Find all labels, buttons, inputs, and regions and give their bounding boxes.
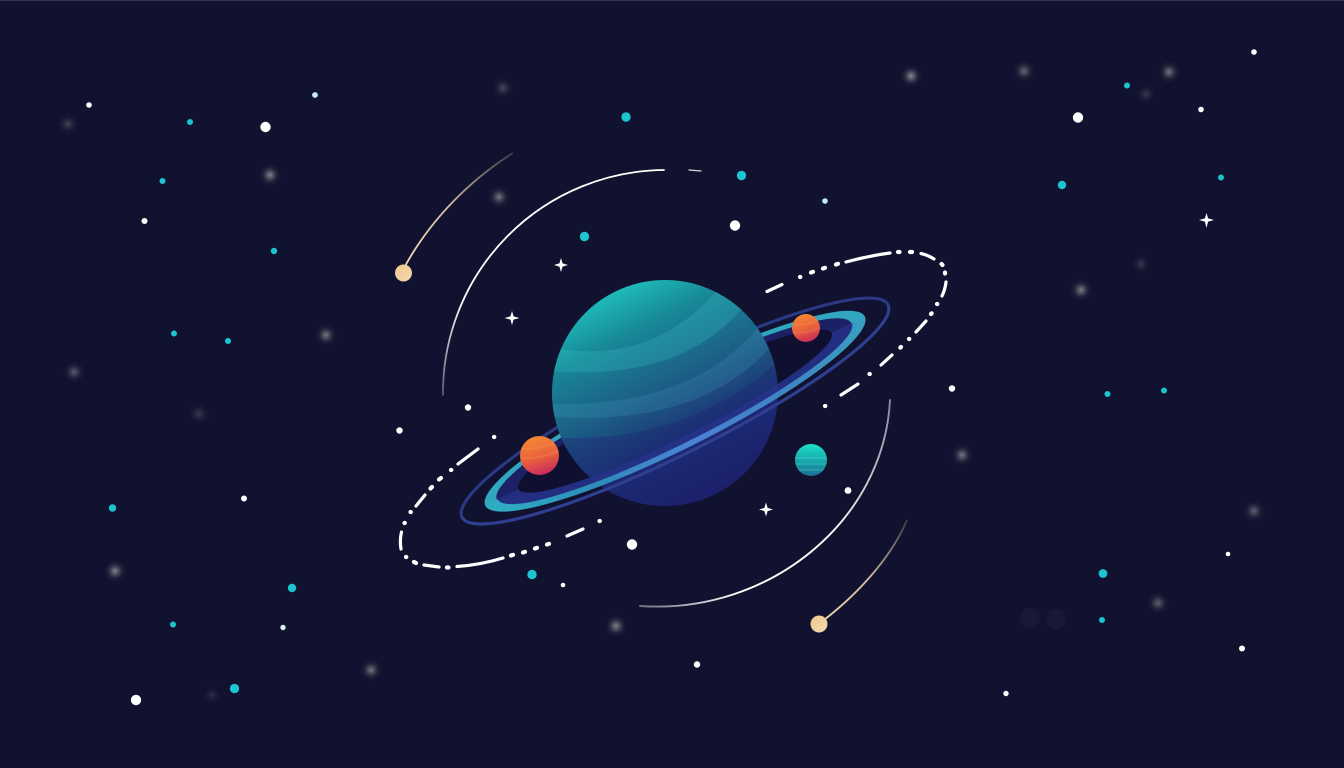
- planet band 3: [562, 365, 777, 476]
- teal moon: [795, 444, 827, 476]
- main planet: [552, 280, 778, 506]
- comet: upper left: [395, 153, 513, 282]
- ring system: front: [462, 305, 907, 556]
- outer orbit arcs: [443, 170, 890, 607]
- blurred background stars: [57, 60, 1265, 705]
- comet: lower right: [810, 520, 907, 632]
- teal stars: [109, 82, 1224, 693]
- sparkle stars: [504, 213, 1214, 516]
- orange moon: right: [792, 314, 820, 342]
- planet band 1: [554, 292, 741, 372]
- orange moon: left: [518, 436, 560, 475]
- ring system: back: [443, 266, 907, 556]
- dashed orbit: [400, 252, 946, 568]
- planet band 2: [540, 328, 772, 418]
- white stars: [86, 49, 1257, 705]
